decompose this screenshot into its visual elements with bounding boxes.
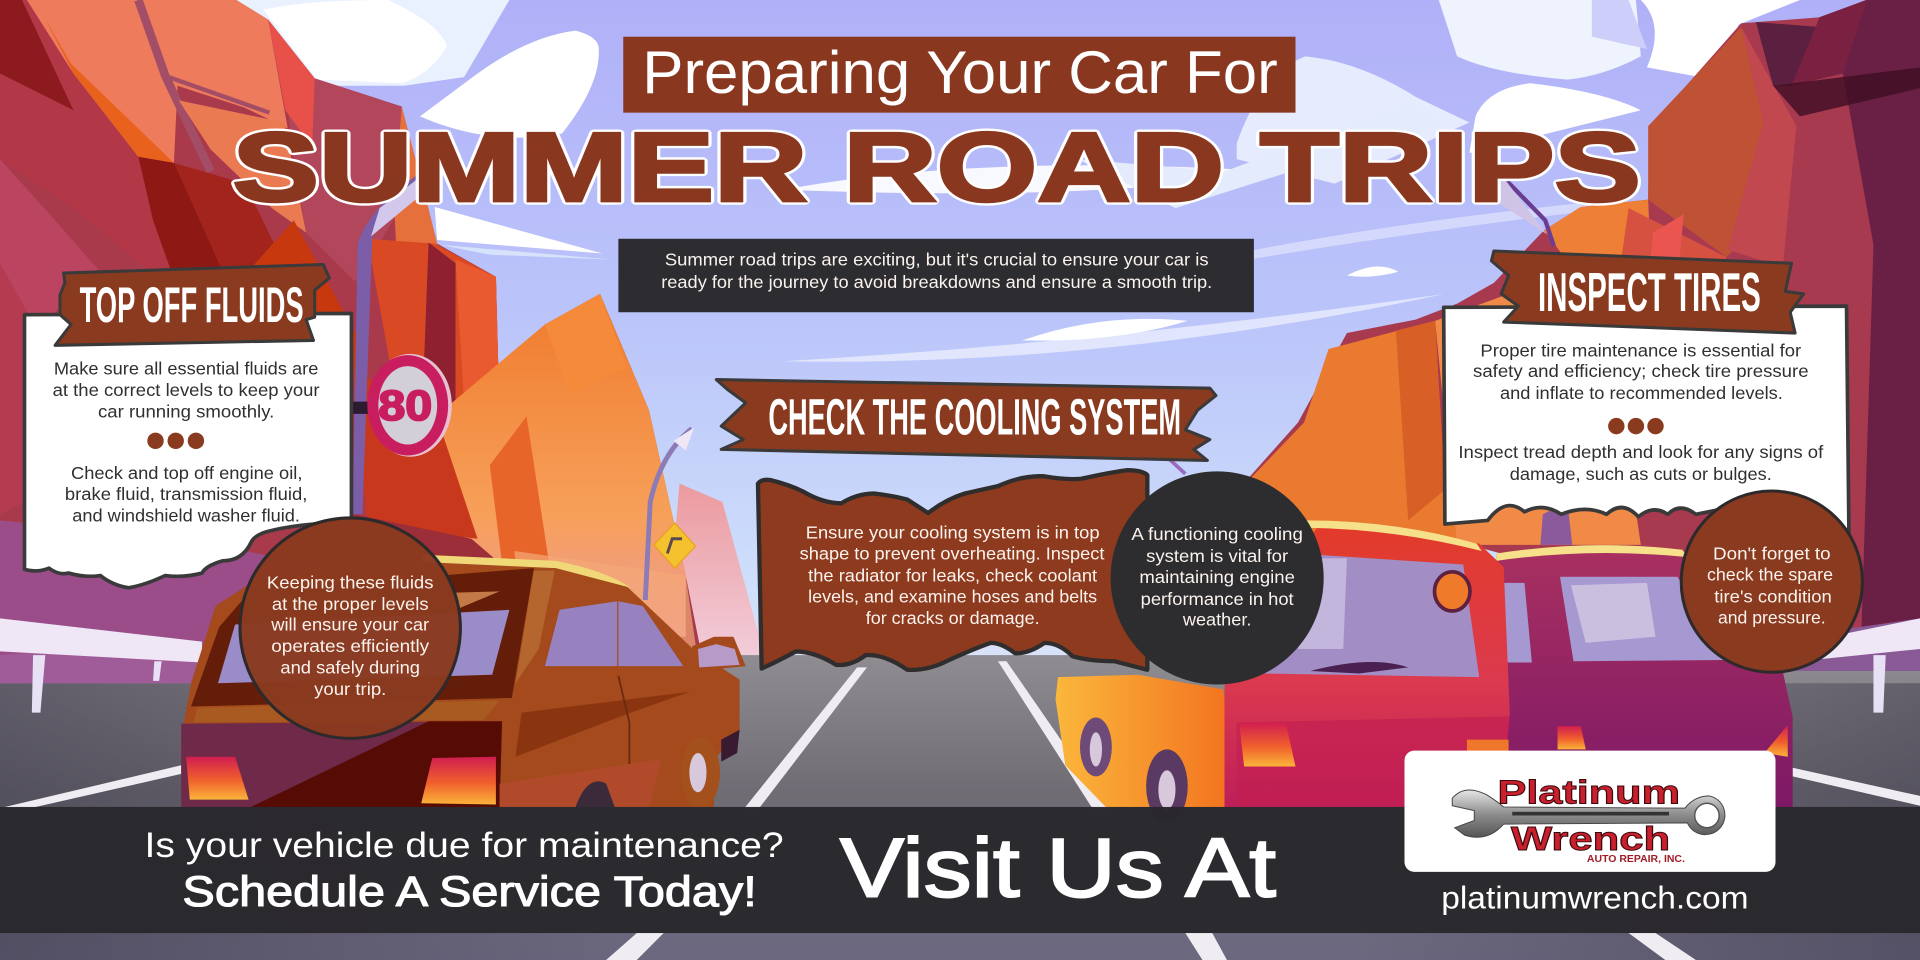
logo wordmark: Wrench [1511, 821, 1670, 858]
street lamps and road sign [353, 171, 422, 514]
heading banner [716, 380, 1216, 460]
maintenance question: Is your vehicle due for maintenance? [144, 825, 784, 865]
callout: spare tire [1681, 491, 1862, 672]
fluids text: Make sure all essential fluids are [54, 359, 318, 379]
cooling text: for cracks or damage. [866, 608, 1040, 628]
logo: platinum wrench [1404, 751, 1776, 872]
callout: functioning cooling system: A functioning cooling [1131, 524, 1303, 544]
left canyon [0, 0, 704, 686]
fluids text [53, 359, 320, 422]
intro text box [618, 239, 1254, 312]
callout: functioning cooling system: weather. [1182, 610, 1251, 630]
intro text box: ready for the journey to avoid breakdowns and ensure a smooth trip. [661, 272, 1212, 292]
tread text: Inspect tread depth and look for any signs of [1458, 442, 1823, 462]
callout: keeping fluids: Keeping these fluids [267, 572, 434, 592]
callout: functioning cooling system [1111, 471, 1324, 684]
heading banner: TOP OFF FLUIDS [80, 277, 304, 333]
torn white card [1444, 306, 1849, 539]
panel: top off fluids [24, 264, 351, 588]
callout: keeping fluids: and safely during [280, 657, 420, 677]
logo wordmark [1498, 774, 1680, 858]
callout: functioning cooling system: performance in hot [1141, 589, 1294, 609]
main title: SUMMER ROAD TRIPS [233, 112, 1641, 222]
car: red car [1224, 520, 1510, 807]
footer band [0, 807, 1920, 933]
right canyon [1247, 0, 1920, 667]
callout: keeping fluids [240, 518, 460, 738]
visit us at: Visit Us At [840, 821, 1276, 914]
car: magenta car [1496, 545, 1793, 807]
tread text: damage, such as cuts or bulges. [1510, 464, 1772, 484]
wavy brown panel [758, 470, 1147, 670]
fluids list: and windshield washer fluid. [72, 506, 300, 526]
tires text: safety and efficiency; check tire pressure [1473, 361, 1809, 381]
road sign: speed limit 80: 80 [378, 382, 432, 430]
logo tagline: AUTO REPAIR, INC. [1587, 854, 1685, 865]
dots divider [1608, 418, 1664, 434]
title line 1: Preparing Your Car For [642, 39, 1278, 106]
callout: keeping fluids: your trip. [314, 679, 386, 699]
tread text [1458, 442, 1823, 484]
clouds [236, 0, 1800, 362]
road sign: speed limit 80 [353, 354, 452, 457]
fluids list: Check and top off engine oil, [71, 463, 302, 483]
callout: functioning cooling system: maintaining engine [1139, 567, 1295, 587]
heading banner [55, 264, 329, 345]
callout: spare tire: check the spare [1707, 564, 1833, 584]
logo wordmark: Platinum [1498, 774, 1680, 811]
far pink rock [661, 484, 759, 686]
cooling text: levels, and examine hoses and belts [808, 586, 1097, 606]
car: yellow pickup [1056, 675, 1237, 823]
callout: keeping fluids: at the proper levels [272, 594, 429, 614]
cooling text: Ensure your cooling system is in top [806, 522, 1100, 542]
fluids text: car running smoothly. [98, 402, 274, 422]
panel: check the cooling system [716, 380, 1216, 670]
website: platinumwrench.com [1441, 880, 1749, 916]
callout: spare tire: tire's condition [1714, 586, 1832, 606]
intro text box: Summer road trips are exciting, but it's crucial to ensure your car is [665, 250, 1209, 270]
cooling text [800, 522, 1105, 628]
schedule call to action: Schedule A Service Today! [182, 868, 757, 916]
torn white card [24, 313, 351, 588]
cooling text: shape to prevent overheating. Inspect [800, 544, 1105, 564]
dots divider [147, 433, 204, 449]
cooling text: the radiator for leaks, check coolant [808, 566, 1097, 586]
callout: keeping fluids: operates efficiently [271, 636, 429, 656]
car: brown wagon [181, 555, 746, 808]
heading banner: CHECK THE COOLING SYSTEM [768, 388, 1181, 446]
main title: SUMMER ROAD TRIPS [233, 112, 1641, 222]
fluids text: at the correct levels to keep your [53, 380, 320, 400]
callout: spare tire: Don't forget to [1713, 544, 1831, 564]
tires text [1473, 340, 1809, 403]
callout: keeping fluids: will ensure your car [270, 615, 429, 635]
callout: spare tire: and pressure. [1718, 607, 1826, 627]
title box [623, 37, 1296, 113]
tires text: Proper tire maintenance is essential for [1480, 340, 1801, 360]
tires text: and inflate to recommended levels. [1500, 383, 1783, 403]
fluids list [65, 463, 307, 526]
road [0, 655, 1920, 960]
heading banner [1491, 251, 1804, 333]
icon: wrench [1452, 790, 1725, 837]
callout: functioning cooling system: system is vital for [1146, 546, 1288, 566]
fluids list: brake fluid, transmission fluid, [65, 484, 307, 504]
panel: inspect tires [1444, 251, 1849, 539]
